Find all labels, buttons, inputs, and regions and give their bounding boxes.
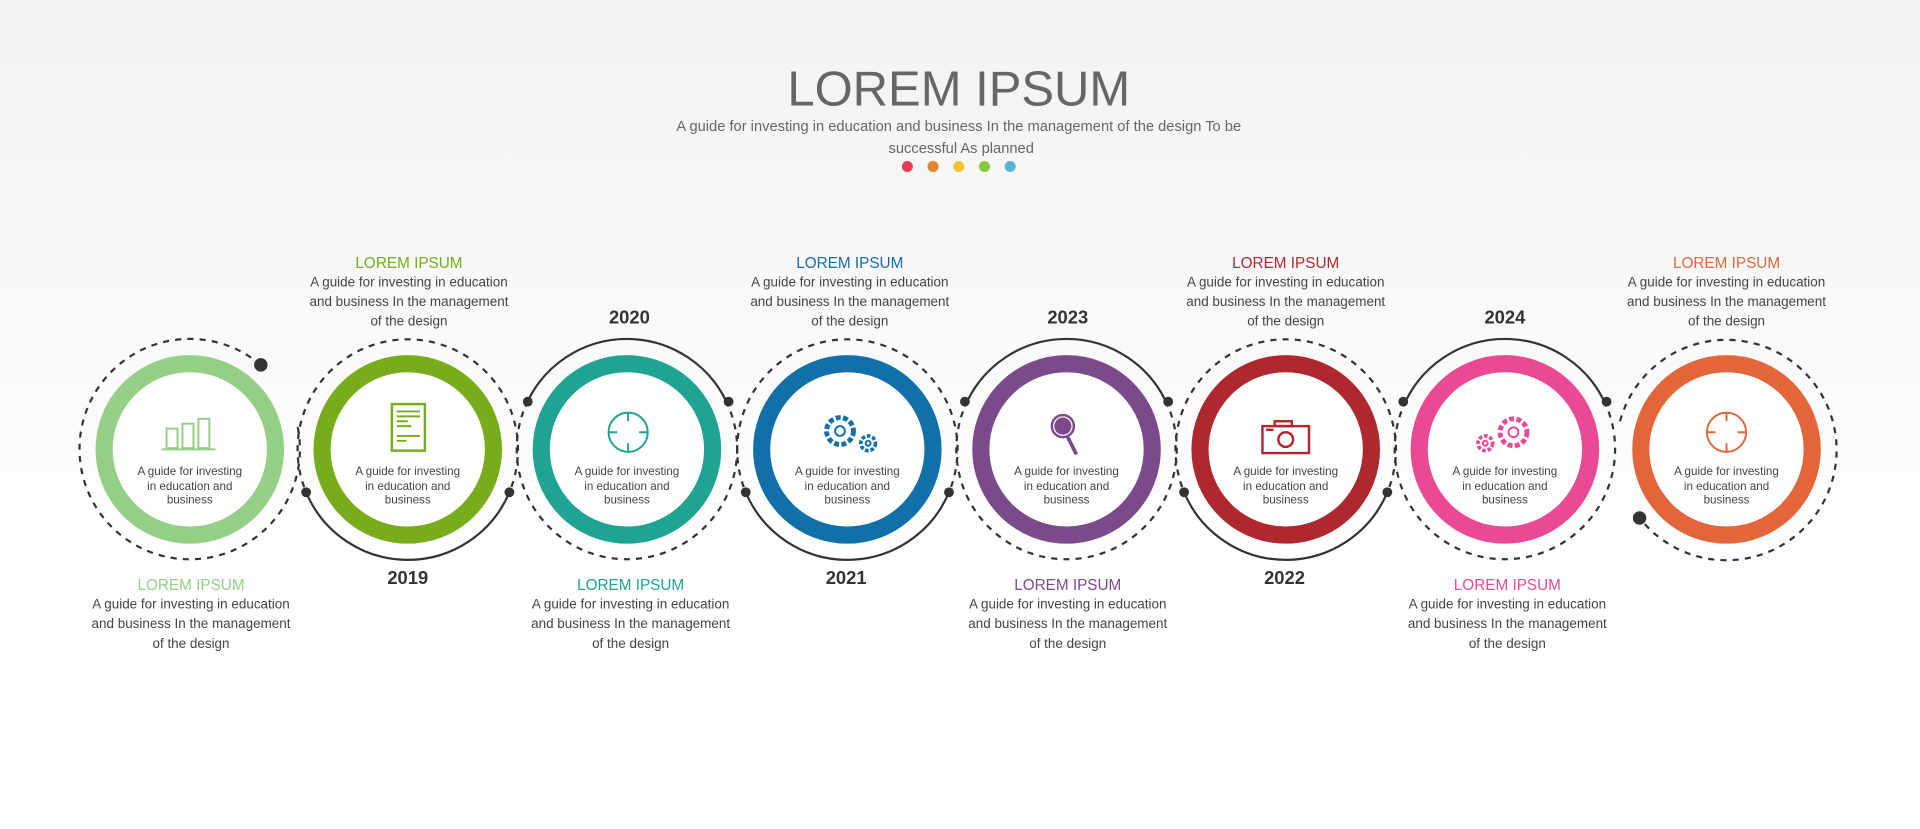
top labels: and business In the management (1627, 294, 1826, 309)
inner texts: business (604, 493, 650, 506)
years: 2019 (387, 567, 428, 588)
top labels: and business In the management (750, 294, 950, 309)
inner texts: A guide for investing (1453, 465, 1557, 478)
bottom labels: of the design (152, 636, 230, 651)
inner texts: business (1704, 493, 1750, 506)
inner texts: business (385, 493, 431, 506)
years (387, 306, 1526, 588)
inner texts: A guide for investing (795, 465, 900, 478)
bottom labels (92, 577, 1607, 651)
top labels (310, 255, 1826, 329)
inner texts: business (824, 493, 870, 506)
inner texts: in education and (584, 480, 670, 493)
top labels: A guide for investing in education (751, 275, 949, 290)
inner texts: business (1263, 493, 1309, 506)
inner texts: in education and (1243, 480, 1328, 493)
subtitle (676, 119, 1241, 157)
inner texts: in education and (365, 480, 450, 493)
inner texts: business (1482, 493, 1528, 506)
top labels: of the design (811, 314, 888, 329)
bottom labels: LOREM IPSUM (1014, 577, 1121, 594)
top labels: and business In the management (1186, 294, 1385, 309)
color dots (902, 161, 1016, 172)
bottom labels: LOREM IPSUM (1454, 577, 1561, 594)
bottom labels: A guide for investing in education (969, 597, 1166, 612)
top labels: of the design (1688, 314, 1765, 329)
inner texts: business (1044, 493, 1090, 506)
rings (104, 364, 1812, 535)
inner texts: in education and (147, 480, 232, 493)
inner texts: A guide for investing (1014, 465, 1119, 478)
subtitle: A guide for investing in education and business In the management of the design To be (676, 119, 1241, 135)
bottom labels: A guide for investing in education (532, 597, 729, 612)
bottom labels: of the design (592, 636, 669, 651)
bottom labels: A guide for investing in education (1409, 597, 1606, 612)
inner texts: in education and (1684, 480, 1769, 493)
bottom labels: of the design (1029, 636, 1106, 651)
bottom labels: LOREM IPSUM (577, 577, 684, 594)
years: 2022 (1264, 567, 1305, 588)
inner texts: A guide for investing (1674, 465, 1779, 478)
top labels: A guide for investing in education (1187, 275, 1384, 290)
inner texts (137, 465, 1779, 506)
inner texts: A guide for investing (575, 465, 679, 478)
top labels: A guide for investing in education (310, 275, 508, 290)
inner texts: A guide for investing (355, 465, 460, 478)
years: 2021 (826, 567, 867, 588)
bottom labels: and business In the management (1408, 616, 1607, 631)
top labels: of the design (1247, 314, 1324, 329)
top labels: LOREM IPSUM (1232, 255, 1339, 272)
top labels: LOREM IPSUM (1673, 255, 1780, 272)
inner texts: A guide for investing (137, 465, 242, 478)
inner texts: in education and (1462, 480, 1548, 493)
icons (162, 404, 1746, 454)
bottom labels: LOREM IPSUM (137, 577, 245, 594)
inner texts: in education and (805, 480, 890, 493)
bottom labels: of the design (1469, 636, 1546, 651)
top labels: of the design (370, 314, 448, 329)
top labels: LOREM IPSUM (796, 255, 903, 272)
inner texts: in education and (1024, 480, 1109, 493)
subtitle: successful As planned (889, 141, 1034, 157)
bottom labels: A guide for investing in education (92, 597, 290, 612)
bottom labels: and business In the management (531, 616, 730, 631)
top labels: LOREM IPSUM (355, 255, 463, 272)
inner texts: A guide for investing (1233, 465, 1338, 478)
title: LOREM IPSUM (787, 62, 1130, 116)
years: 2024 (1484, 306, 1526, 327)
bottom labels: and business In the management (968, 616, 1167, 631)
top labels: and business In the management (310, 294, 509, 309)
years: 2020 (609, 306, 650, 327)
inner texts: business (167, 493, 213, 506)
top labels: A guide for investing in education (1628, 275, 1825, 290)
connector arcs (79, 339, 1837, 560)
bottom labels: and business In the management (92, 616, 291, 631)
years: 2023 (1047, 306, 1088, 327)
